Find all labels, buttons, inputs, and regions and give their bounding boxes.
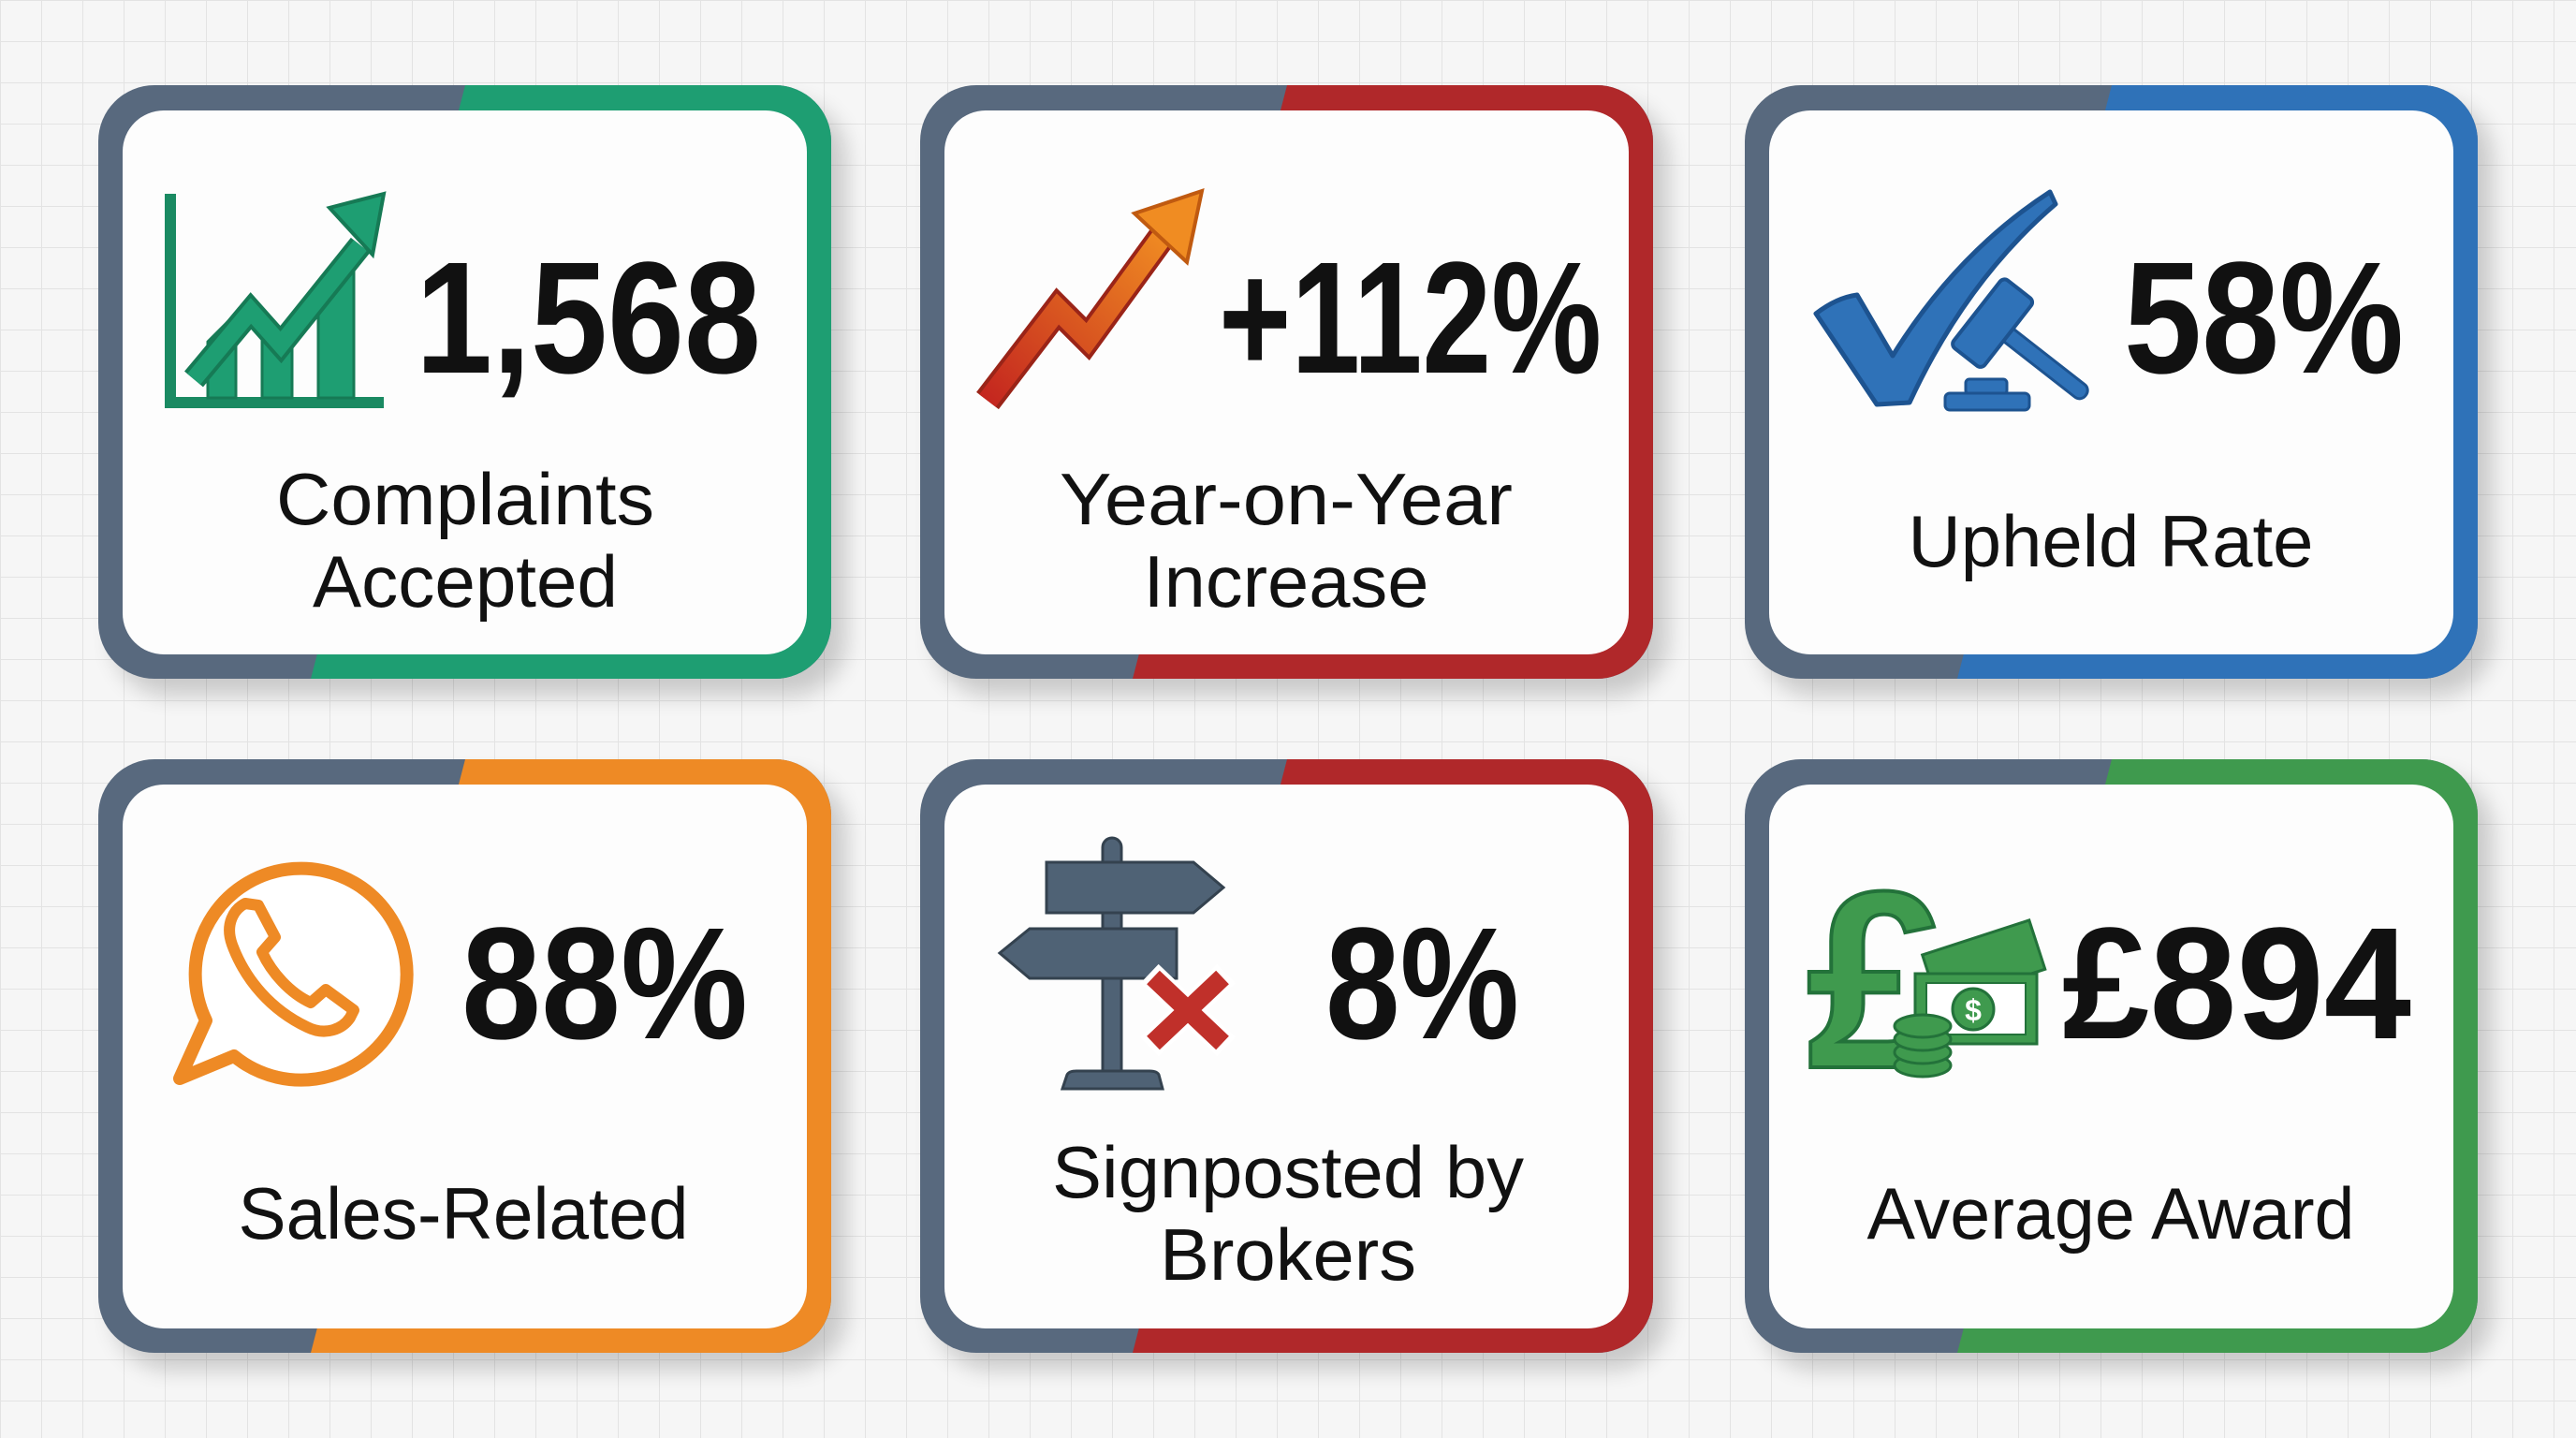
number: 88%: 88% [461, 895, 748, 1073]
card: signposted [920, 759, 1668, 1370]
label: signposted by brokers: Brokers [1160, 1213, 1416, 1296]
number: £894: £894 [2062, 895, 2411, 1073]
label: year-on-year increase: Year-on-Year [1060, 458, 1513, 540]
label: signposted by brokers: Signposted by [1052, 1131, 1524, 1213]
label: complaints accepted: Complaints [276, 458, 654, 540]
card: upheld rate [1745, 85, 2493, 696]
label: signposted by brokers [1052, 1131, 1524, 1296]
card: sales-related [98, 759, 846, 1370]
card: complaints accepted [98, 85, 846, 696]
icon: checkmark and gavel [1816, 192, 2112, 430]
icon: signpost with cross [1000, 838, 1226, 1089]
label: year-on-year increase [1060, 458, 1513, 623]
label: year-on-year increase: Increase [1144, 540, 1428, 623]
number: 58%: 58% [2124, 229, 2404, 407]
icon: pound and money [1807, 840, 2045, 1122]
label: upheld rate: Upheld Rate [1908, 500, 2314, 582]
icon: rising arrow [988, 191, 1202, 401]
number: 1,568: 1,568 [416, 229, 761, 407]
number: +112%: +112% [1219, 229, 1602, 407]
label: complaints accepted: Accepted [313, 540, 618, 623]
icon: phone chat bubble [180, 869, 407, 1080]
icon: pound and money: £ [1807, 840, 1947, 1122]
card: average award [1745, 759, 2493, 1370]
label: complaints accepted [276, 458, 654, 623]
icon: bar chart up [170, 194, 384, 403]
label: sales-related: Sales-Related [238, 1172, 689, 1255]
card: year-on-year [920, 85, 1668, 696]
label: average award: Average Award [1866, 1172, 2355, 1255]
icon: pound and money: $ [1965, 993, 1982, 1027]
number: 8%: 8% [1325, 895, 1519, 1073]
